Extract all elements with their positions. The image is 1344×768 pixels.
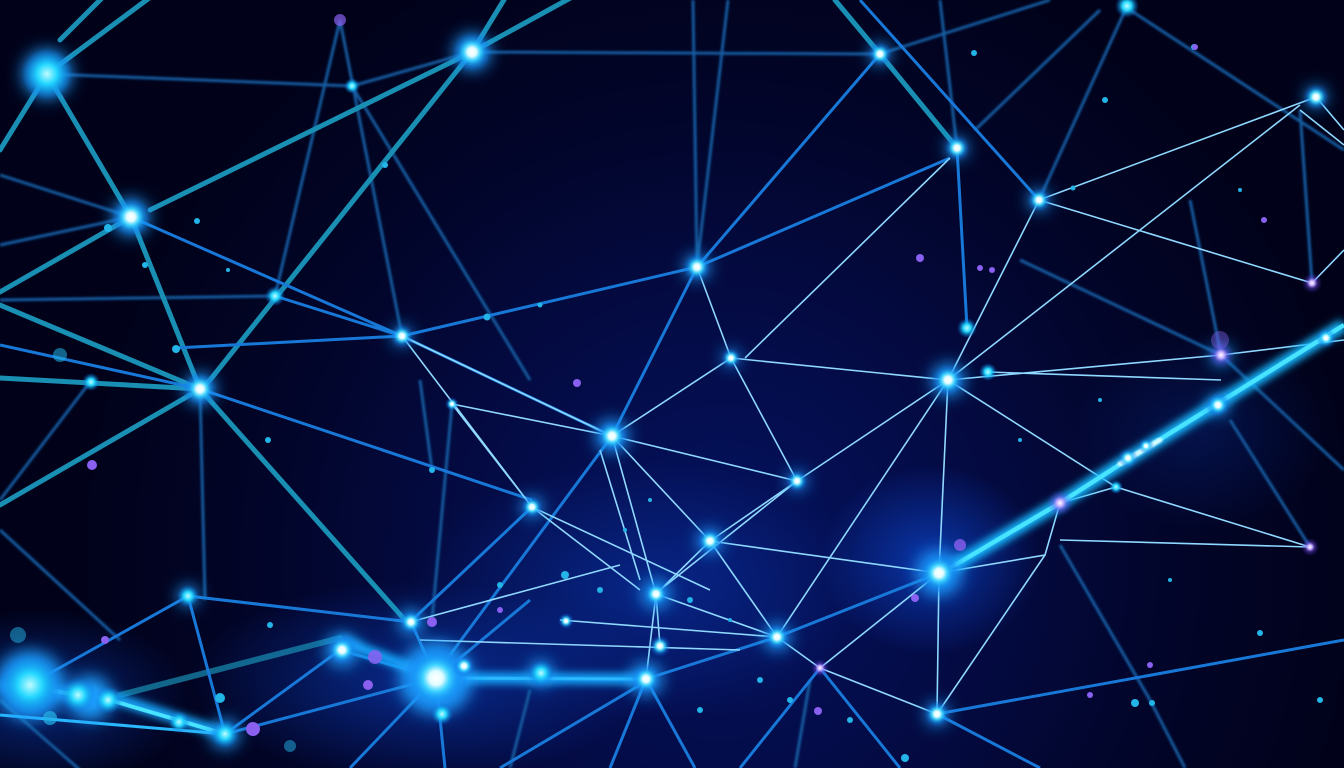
bright diagonal beam	[950, 325, 1344, 568]
thick teal lines	[0, 0, 957, 695]
fine bright lines	[402, 97, 1344, 714]
background haze	[0, 330, 1330, 768]
lower-left bright beam	[0, 640, 646, 734]
